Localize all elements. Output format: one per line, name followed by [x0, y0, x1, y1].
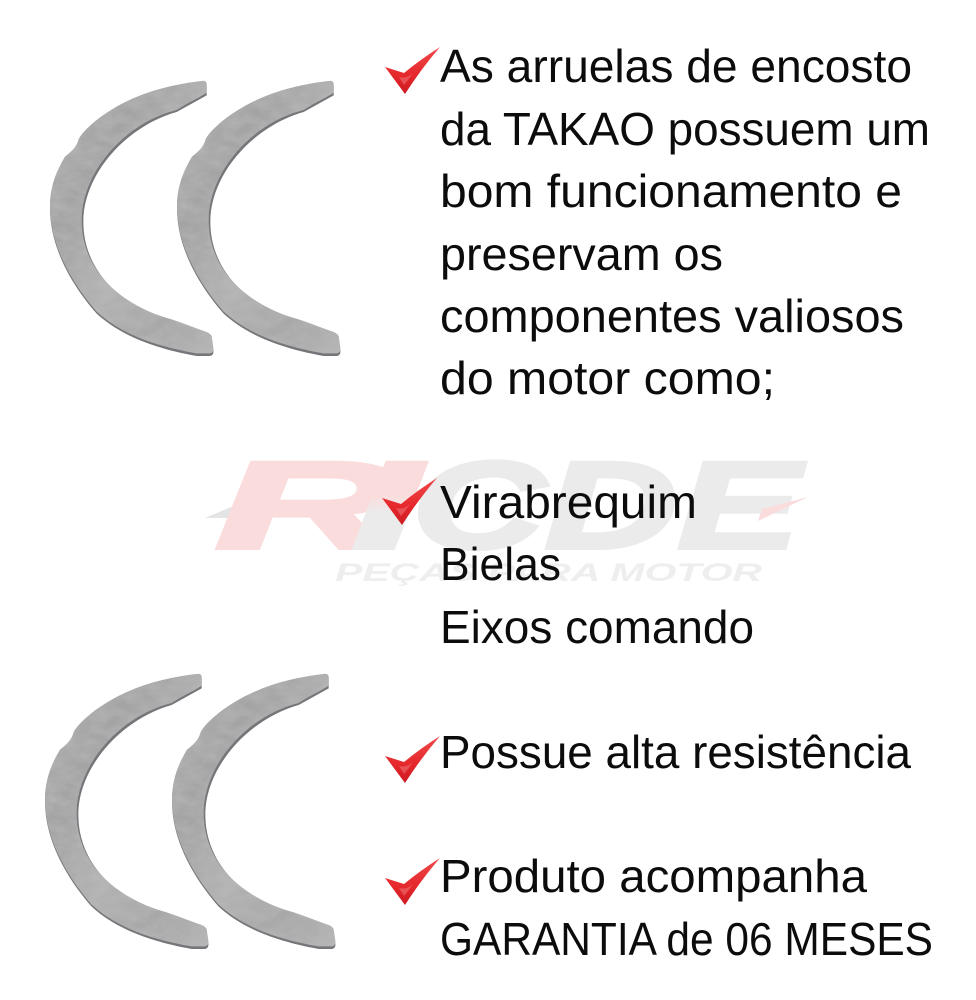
text block: intro: preservam os — [440, 228, 723, 280]
watermark logo — [205, 437, 808, 587]
icon: check 3 — [385, 736, 440, 783]
text block: intro — [440, 40, 930, 404]
washer top left — [50, 81, 213, 356]
watermark logo: I — [352, 437, 425, 575]
text block: intro: As arruelas de encosto — [440, 40, 912, 92]
text: resistance: Possue alta resistência — [440, 726, 911, 778]
text block: intro: componentes valiosos — [440, 290, 904, 342]
washers: top pair — [50, 81, 340, 356]
text block: components: Virabrequim — [440, 476, 697, 528]
watermark logo: PEÇAS PARA MOTOR — [335, 559, 762, 587]
washer bottom left — [45, 674, 208, 949]
washer bottom right — [172, 674, 335, 949]
text block: intro: bom funcionamento e — [440, 165, 902, 217]
text block: intro: da TAKAO possuem um — [440, 103, 930, 155]
icon: check 2 — [382, 478, 437, 525]
text block: warranty: GARANTIA de 06 MESES — [440, 913, 933, 965]
text block: warranty: Produto acompanha — [440, 850, 867, 902]
watermark logo: R — [215, 437, 400, 575]
washers: bottom pair — [45, 674, 335, 949]
washer top right — [177, 81, 340, 356]
icon: check 4 — [385, 858, 440, 905]
text block: intro: do motor como; — [440, 352, 775, 404]
watermark logo: CDE — [412, 437, 805, 575]
text block: components — [440, 476, 754, 653]
text block: components: Eixos comando — [440, 601, 754, 653]
text block: components: Bielas — [440, 538, 561, 590]
icon: check 1 — [385, 47, 440, 94]
text block: warranty — [440, 850, 933, 965]
